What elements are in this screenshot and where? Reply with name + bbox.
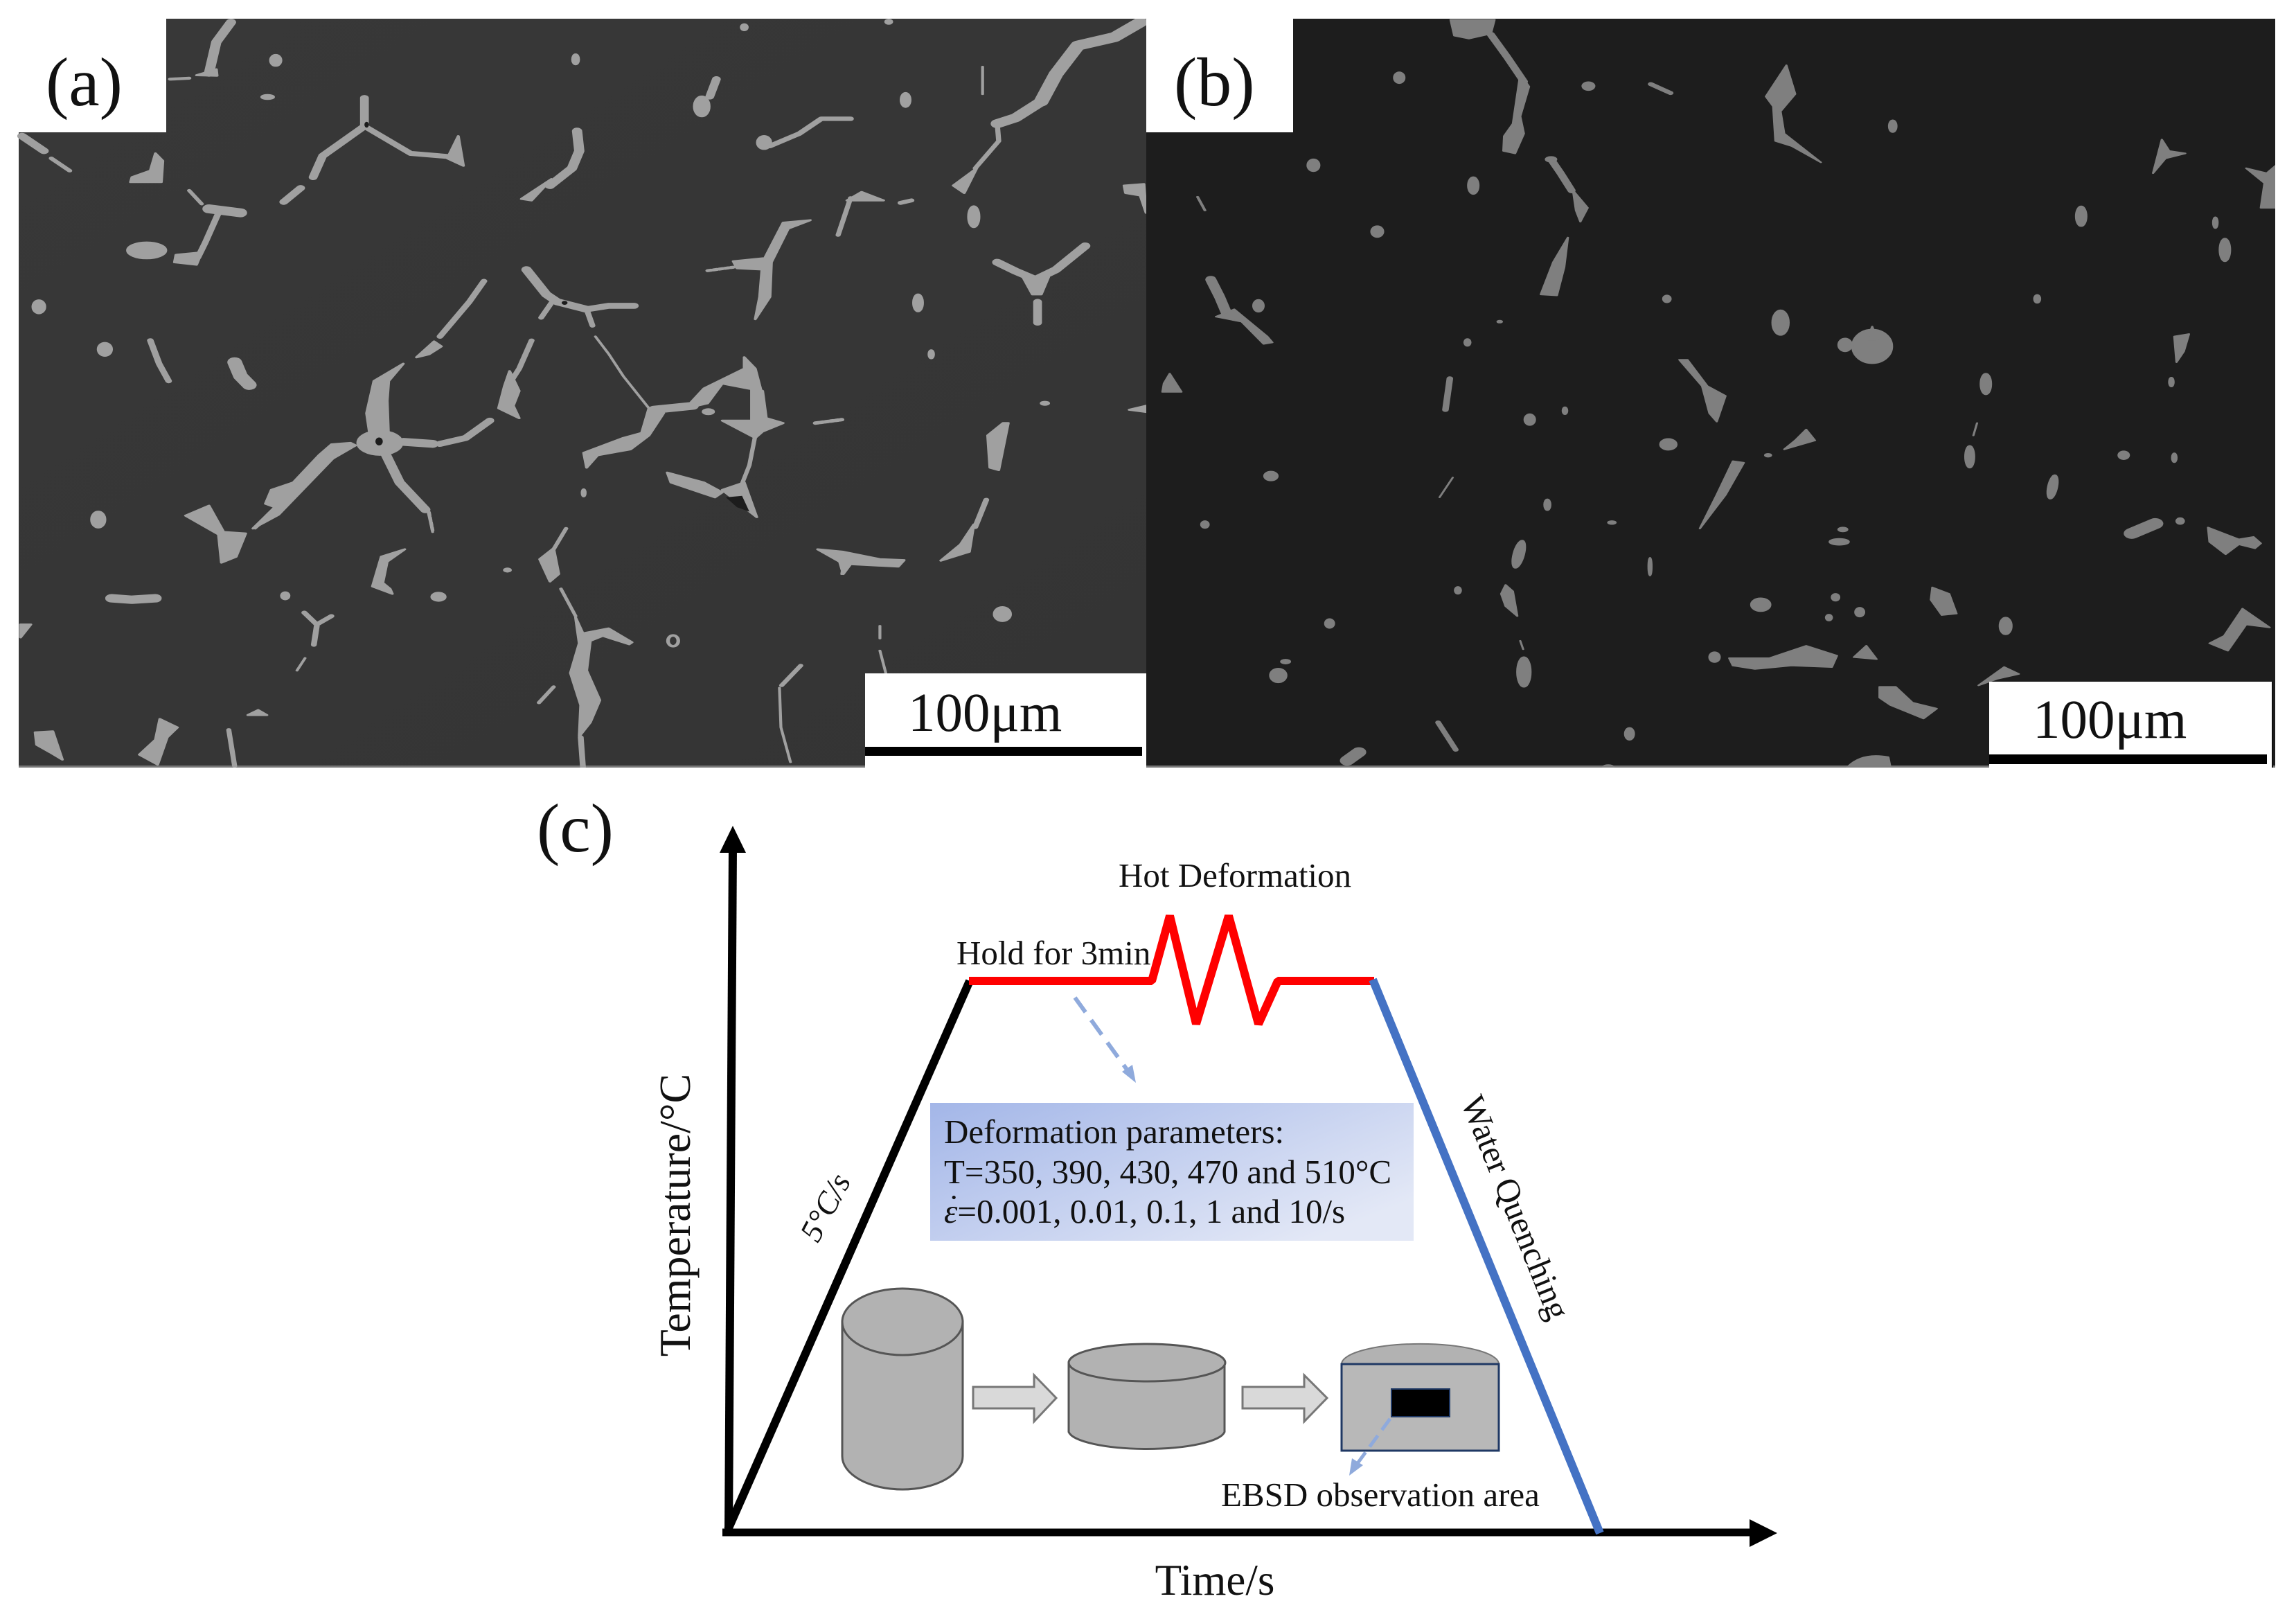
panel a scale bar: 100μm [908, 683, 1062, 743]
y axis arrow [720, 826, 746, 1534]
x axis arrow [722, 1519, 1777, 1547]
heating ramp [728, 981, 970, 1530]
heating rate label: 5°C/s [793, 1167, 857, 1247]
panel b label [1146, 0, 1293, 132]
deformation parameters box [930, 1103, 1414, 1241]
EBSD label: EBSD observation area [1221, 1476, 1540, 1514]
x axis title: Time/s [1155, 1556, 1274, 1604]
y axis title: Temperature/°C [650, 1074, 700, 1356]
panel b label: (b) [1174, 44, 1255, 121]
panel a: SEM micrograph [0, 0, 1148, 768]
hold label: Hold for 3min [956, 934, 1150, 972]
panel c: hot deformation schedule chart [650, 826, 1777, 1604]
panel c label: (c) [537, 790, 614, 867]
dark eutectic detail [364, 122, 749, 512]
deformation parameters box: Deformation parameters: [944, 1113, 1284, 1151]
compressed cylinder [1069, 1344, 1225, 1449]
panel a label [0, 0, 166, 132]
hot deformation label: Hot Deformation [1119, 856, 1351, 894]
hold and deformation curve [969, 916, 1374, 1024]
deformation parameters box: ˙ [948, 1187, 959, 1226]
tall cylinder specimen [842, 1289, 963, 1489]
deformation parameters box: ε=0.001, 0.01, 0.1, 1 and 10/s [944, 1192, 1345, 1230]
sectioned specimen with EBSD area [1342, 1344, 1499, 1451]
phase network in panel a [21, 20, 1148, 767]
water quench line [1373, 980, 1600, 1533]
deformation parameters box: T=350, 390, 430, 470 and 510°C [944, 1153, 1391, 1191]
panel a label: (a) [46, 44, 123, 121]
arrow: compression [973, 1375, 1056, 1422]
dashed arrow to parameters box [1075, 998, 1136, 1083]
panel b scale bar [1989, 682, 2273, 768]
panel b: SEM micrograph [0, 0, 2296, 773]
water quenching label: Water Quenching [1454, 1090, 1578, 1325]
panel b scale bar: 100μm [2033, 690, 2187, 750]
arrow: sectioning [1243, 1375, 1327, 1422]
phase particles in panel b [1162, 20, 2275, 769]
panel a scale bar [865, 673, 1148, 768]
dashed arrow to EBSD label [1349, 1419, 1390, 1476]
